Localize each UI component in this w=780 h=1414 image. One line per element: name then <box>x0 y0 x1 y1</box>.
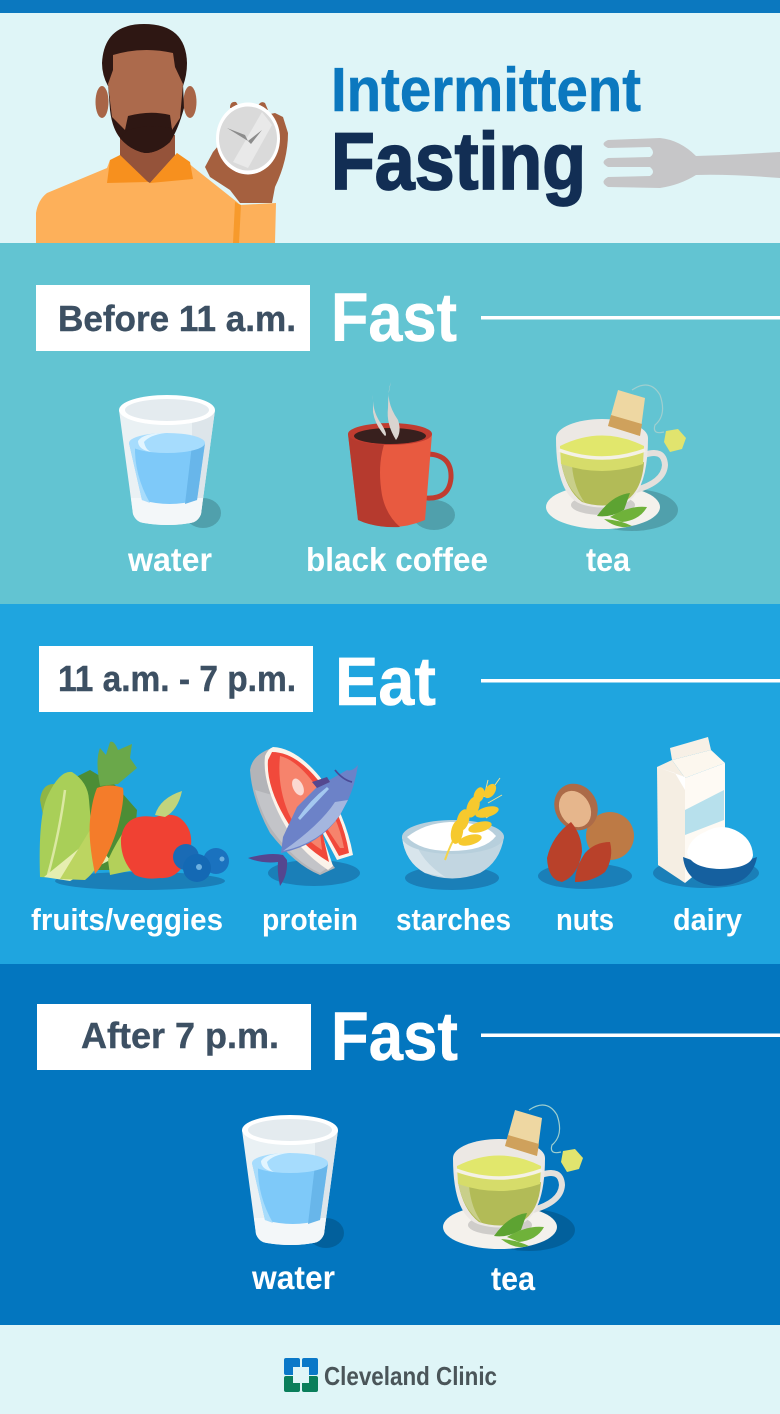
label: tea: tea <box>586 541 631 578</box>
heading: Fast <box>331 279 457 356</box>
icon: tea <box>546 385 686 531</box>
time label <box>39 646 313 712</box>
icon: black coffee <box>348 382 455 530</box>
time label <box>36 285 310 351</box>
label: protein: protein <box>262 902 358 937</box>
label: starches: starches <box>396 902 511 937</box>
icon: water glass <box>119 395 221 528</box>
icon: nuts <box>538 776 634 889</box>
label: nuts: nuts <box>556 902 614 937</box>
label: dairy: dairy <box>673 902 743 937</box>
time label: Before 11 a.m. <box>58 298 296 339</box>
panel: after 7 p.m. fast <box>0 964 780 1325</box>
time label: After 7 p.m. <box>81 1015 279 1056</box>
panel: eat window <box>0 604 780 964</box>
panel: header <box>0 13 780 243</box>
heading: Fast <box>331 998 458 1075</box>
icon: Cleveland Clinic logo <box>284 1358 318 1392</box>
icon: fork <box>604 138 780 188</box>
label: water: water <box>251 1259 335 1296</box>
icon: man holding clock <box>36 24 288 243</box>
label: fruits and veggies: fruits/veggies <box>31 902 223 937</box>
heading: Eat <box>335 643 436 720</box>
logo text: Cleveland Clinic <box>324 1361 497 1391</box>
panel: footer <box>0 1325 780 1414</box>
top bar <box>0 0 780 13</box>
title <box>331 56 641 207</box>
label: tea: tea <box>491 1260 536 1297</box>
title: Fasting <box>331 117 586 207</box>
icon: fruits and veggies <box>40 742 229 890</box>
time label: 11 a.m. - 7 p.m. <box>58 658 296 699</box>
icon: water glass <box>242 1115 344 1248</box>
icon: protein <box>248 747 360 886</box>
label: water: water <box>127 541 212 578</box>
icon: tea <box>443 1105 583 1251</box>
panel: before 11 a.m. fast <box>0 243 780 604</box>
time label <box>37 1004 311 1070</box>
title: Intermittent <box>331 56 641 125</box>
label: black coffee: black coffee <box>306 541 488 578</box>
icon: dairy <box>653 737 759 888</box>
icon: starches <box>402 778 504 890</box>
